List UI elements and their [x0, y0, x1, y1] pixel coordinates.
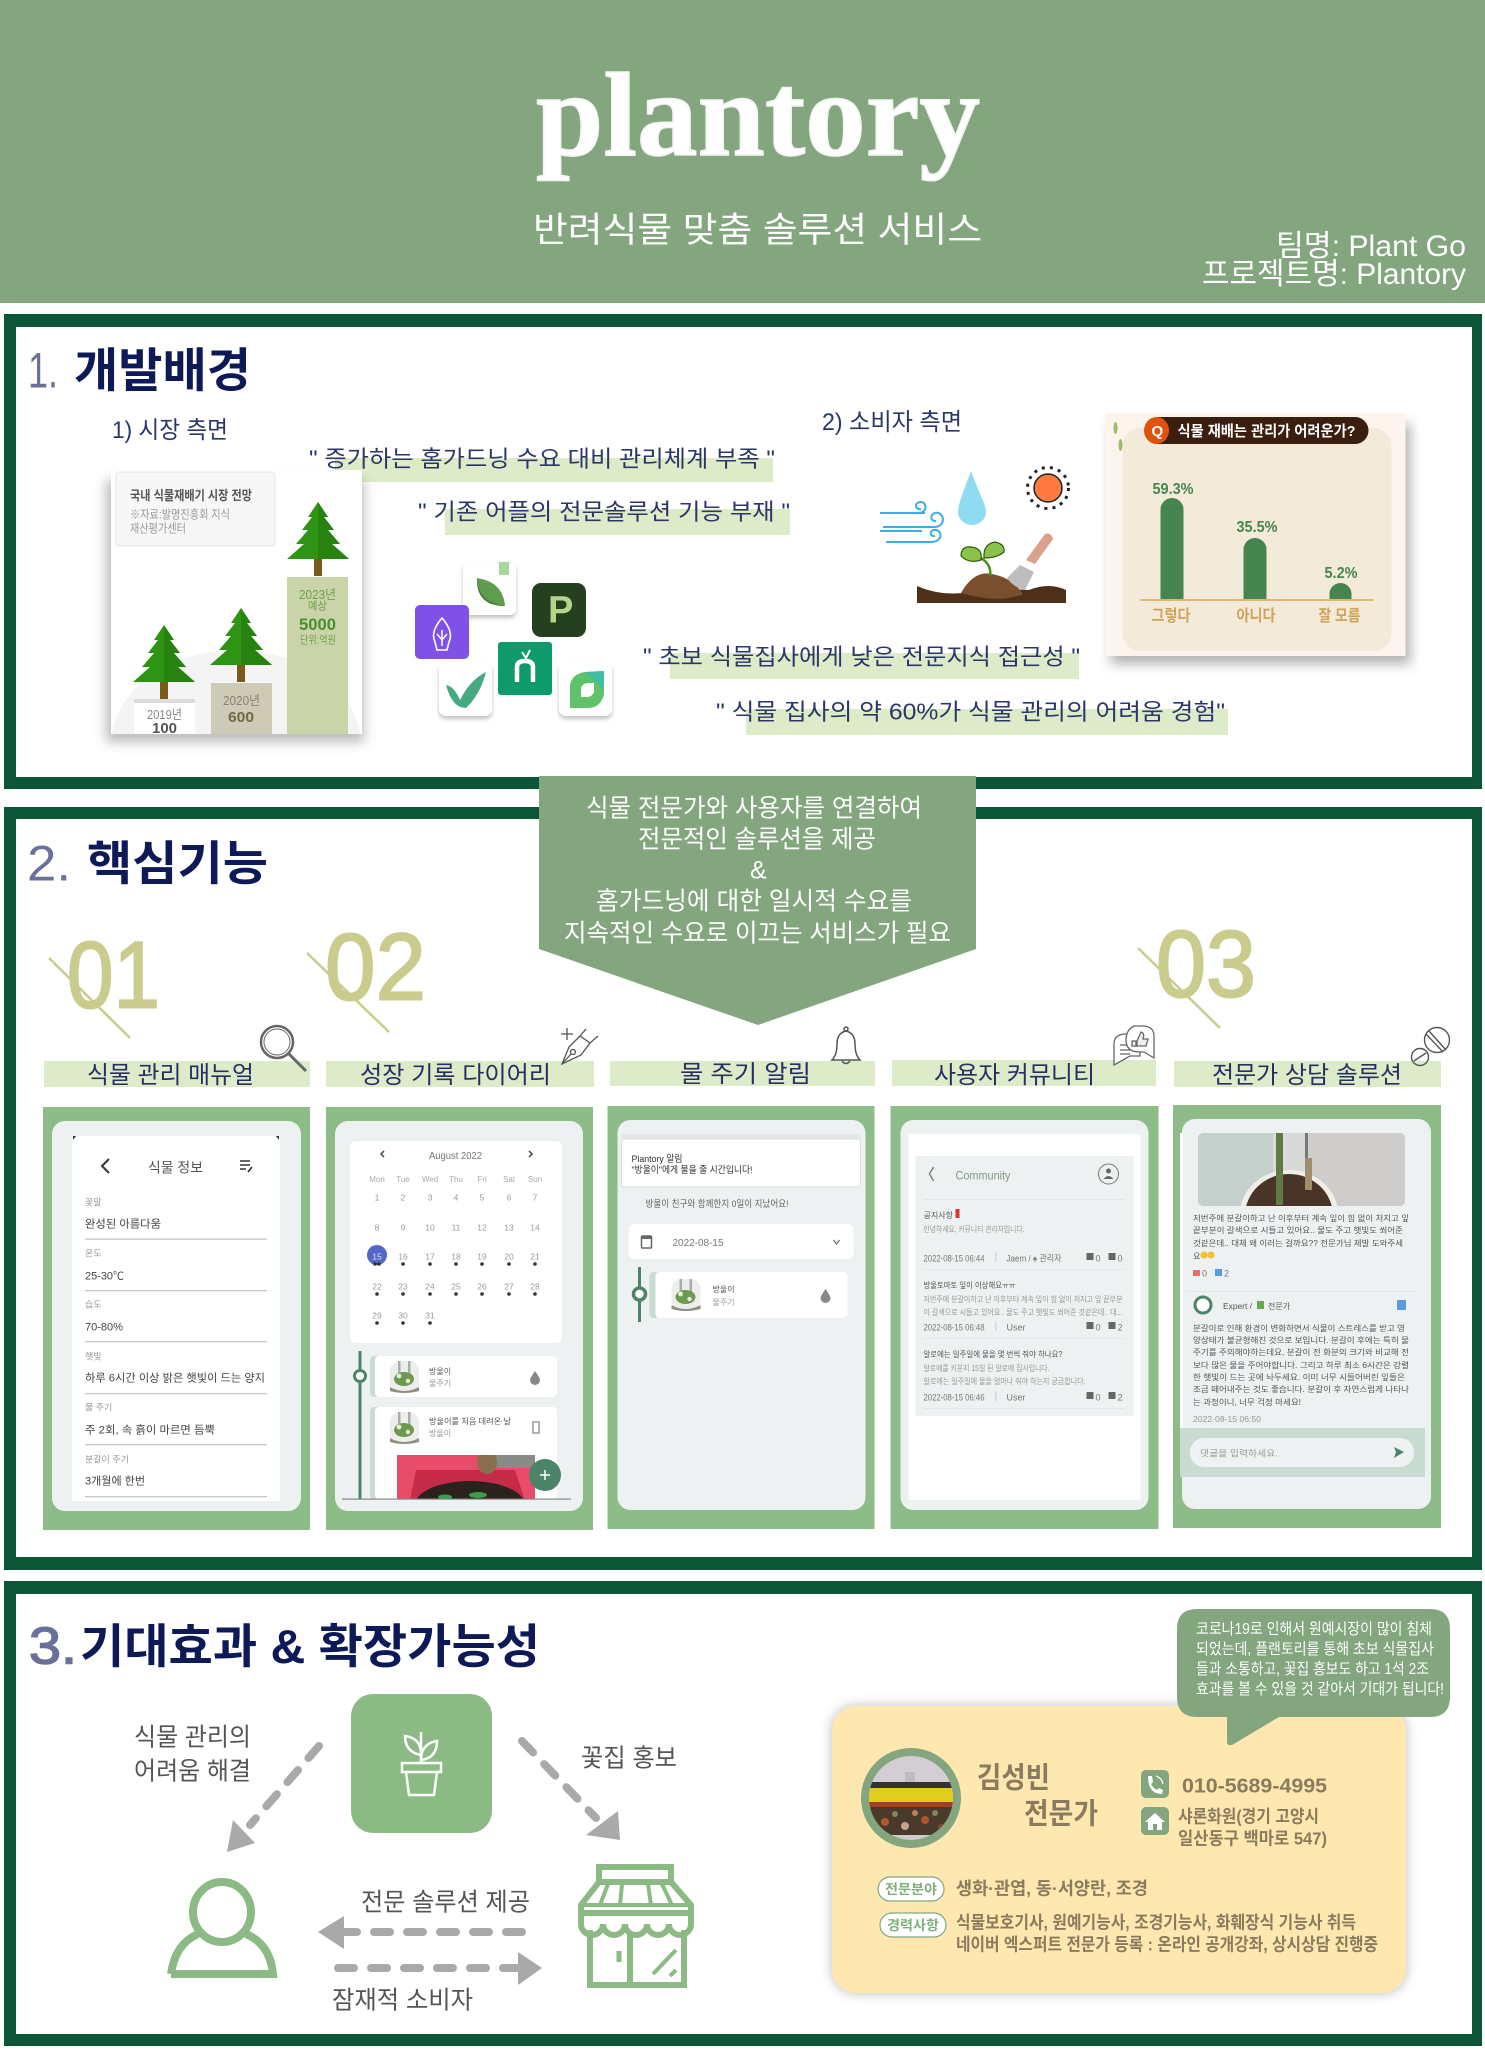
- calendar: Tue: [396, 1175, 410, 1184]
- calendar: 30: [398, 1310, 408, 1320]
- calendar: Wed: [422, 1175, 438, 1184]
- calendar: [350, 1141, 562, 1343]
- subtitle: 반려식물 맞춤 솔루션 서비스: [533, 211, 982, 250]
- market forecast chart: 재산평가센터: [130, 521, 186, 535]
- calendar: 6: [507, 1192, 512, 1202]
- phone card 1: plant info: 하루 6시간 이상 밝은 햇빛이 드는 양지: [85, 1370, 265, 1384]
- market forecast chart: 2019년: [147, 707, 182, 722]
- market forecast chart: 2020년: [223, 693, 260, 708]
- phone card 2: growth diary: [326, 1107, 593, 1530]
- phone card 4: community: Jaem / ♠ 관리자: [1006, 1253, 1062, 1263]
- header banner: [0, 0, 1485, 303]
- calendar: 10: [425, 1222, 435, 1232]
- quote 4: " 식물 집사의 약 60%가 식물 관리의 어려움 경험": [716, 698, 1225, 724]
- heading: 3: 기대효과 & 확장가능성: [80, 1620, 540, 1673]
- phone card 5: expert consultation: 전문가: [1268, 1301, 1291, 1311]
- date select: [628, 1224, 854, 1259]
- feature title 1: 식물 관리 매뉴얼: [87, 1062, 254, 1089]
- diary timeline: 방울이: [429, 1366, 451, 1376]
- number 01: [49, 922, 160, 1038]
- feature title 4: 사용자 커뮤니티: [934, 1062, 1095, 1089]
- icon: phone: [1141, 1770, 1169, 1798]
- calendar: August 2022: [429, 1151, 482, 1162]
- calendar: 19: [477, 1251, 487, 1261]
- watering timeline: 방울이: [712, 1284, 735, 1294]
- survey bar chart: 그렇다: [1152, 606, 1191, 625]
- icons: gardening apps: [415, 562, 612, 719]
- callout: need statement banner: [539, 776, 976, 1025]
- phone card 1: plant info: 25-30℃: [85, 1270, 124, 1282]
- number 01: 01: [67, 922, 160, 1028]
- phone card 5: expert consultation: Expert /: [1223, 1302, 1253, 1311]
- phone card 4: community: 알로에는 일주일에 물을 얼마나 줘야 하는지 궁금합니다.: [924, 1376, 1086, 1386]
- calendar: 21: [530, 1251, 540, 1261]
- watering timeline: [634, 1267, 848, 1322]
- date select: 2022-08-15: [672, 1238, 724, 1249]
- phone card 1: plant info: 분갈이 주기: [85, 1454, 129, 1464]
- phone card 3: watering alert: 방울이 친구와 함께한지 0일이 지났어요!: [646, 1198, 788, 1210]
- feature title 1: [44, 1061, 310, 1089]
- plant photo: [1198, 1133, 1405, 1206]
- career: 네이버 엑스퍼트 전문가 등록 : 온라인 공개강좌, 상시상담 진행중: [956, 1934, 1378, 1954]
- calendar: Sun: [528, 1175, 542, 1184]
- phone card 4: community: 0: [1118, 1253, 1123, 1263]
- calendar: 25: [451, 1281, 461, 1291]
- phone card 4: community: 2022-08-15 06:46: [924, 1392, 984, 1402]
- survey bar chart: 잘 모름: [1318, 607, 1361, 625]
- project name: 프로젝트명: Plantory: [1202, 258, 1466, 291]
- calendar: 20: [504, 1251, 514, 1261]
- heading: 2: [27, 835, 268, 891]
- icon: fountain pen: [561, 1028, 598, 1064]
- callout: expert quote bubble: 코로나19로 인해서 원예시장이 많이 침체: [1196, 1620, 1432, 1638]
- label: solving plant care difficulty: [134, 1723, 251, 1785]
- career: 식물보호기사, 원예기능사, 조경기능사, 화훼장식 기능사 취득: [956, 1912, 1356, 1932]
- diary timeline: 방울이: [429, 1428, 451, 1438]
- phone card 5: expert consultation: 0: [1202, 1268, 1207, 1278]
- diary timeline: 물주기: [429, 1379, 451, 1388]
- calendar: 27: [504, 1281, 514, 1291]
- calendar: 1: [375, 1192, 380, 1202]
- phone card 4: community: 공지사항: [924, 1211, 954, 1220]
- title: plantory: [536, 48, 980, 181]
- phone card 4: community: 알로에를 키운지 15일 된 알로에 집사입니다.: [924, 1363, 1050, 1373]
- calendar: Sat: [503, 1175, 516, 1184]
- phone card 5: expert consultation: 조금 떼어내주는 것도 좋습니다. 분갈이 후 자연스럽게 나타나: [1193, 1384, 1410, 1394]
- phone card 1: plant info: 꽃말: [85, 1196, 102, 1207]
- callout: need statement banner: 전문적인 솔루션을 제공: [638, 825, 876, 853]
- calendar: 17: [425, 1251, 435, 1261]
- career: 경력사항: [887, 1918, 940, 1933]
- phone card 5: expert consultation: 는 과정이니, 너무 걱정 마세요!: [1193, 1397, 1301, 1407]
- market forecast chart: 예상: [308, 599, 327, 612]
- quote 1: [309, 445, 775, 482]
- callout: expert quote bubble: 되었는데, 플랜토리를 통해 초보 식물집사: [1196, 1640, 1434, 1658]
- phone card 4: community: Community: [956, 1168, 1010, 1182]
- arrow: shop to user: [318, 1916, 522, 1949]
- calendar: 5: [480, 1192, 485, 1202]
- calendar: 13: [504, 1222, 514, 1232]
- arrow: plant to user: [227, 1746, 319, 1852]
- calendar: 14: [530, 1222, 540, 1232]
- expert photo: [861, 1748, 961, 1848]
- callout: expert quote bubble: 효과를 볼 수 있을 것 같아서 기대가 됩니다!: [1196, 1680, 1444, 1698]
- calendar: 7: [533, 1192, 538, 1202]
- feature title 3: [610, 1061, 875, 1088]
- market forecast chart: 2023년: [299, 587, 336, 602]
- market forecast chart: 5000: [299, 615, 336, 634]
- panel: development background: [4, 314, 1482, 840]
- phone card 5: expert consultation: 주기를 주의해야하는데요, 분갈이 전 화분의 크기와 비교해 전: [1193, 1347, 1409, 1357]
- market forecast chart: 100: [152, 720, 177, 737]
- phone number: 010-5689-4995: [1182, 1775, 1327, 1797]
- heading: 2: 핵심기능: [87, 837, 268, 890]
- calendar: Fri: [477, 1175, 487, 1184]
- phone card 5: expert consultation: 보다 많은 물을 주어야합니다. 그리고 하루 최소 6시간은 강렬: [1193, 1360, 1409, 1370]
- plant square icon: [351, 1694, 492, 1833]
- icon: magnifier: [261, 1026, 306, 1071]
- heading: 2: 2.: [27, 835, 71, 891]
- heading: 1: 1.: [28, 342, 58, 398]
- number 02: 02: [325, 914, 426, 1020]
- panel: expected effects: [4, 1581, 1482, 2046]
- team name: 팀명: Plant Go: [1276, 230, 1466, 263]
- quote 4: [716, 698, 1228, 735]
- calendar: 28: [530, 1281, 540, 1291]
- feature title 2: 성장 기록 다이어리: [360, 1062, 551, 1089]
- sub heading: market: 1) 시장 측면: [112, 417, 228, 444]
- arrow: user to shop: [338, 1952, 542, 1985]
- callout: expert quote bubble: 들과 소통하고, 꽃집 홍보도 하고 1석 2조: [1196, 1660, 1429, 1678]
- phone card 4: community: 0: [1096, 1322, 1101, 1332]
- calendar: 31: [425, 1310, 435, 1320]
- heading: 1: 개발배경: [74, 344, 251, 397]
- career: [880, 1912, 1378, 1954]
- comment input: 댓글을 입력하세요.: [1200, 1447, 1278, 1458]
- feature title 4: [892, 1060, 1156, 1089]
- phone card 4: community: 안녕하세요, 커뮤니티 관리자입니다.: [924, 1224, 1024, 1234]
- calendar: 18: [451, 1251, 461, 1261]
- panel: core features: [4, 807, 1482, 1570]
- arrow: plant to shop: [522, 1741, 620, 1840]
- notification: [622, 1139, 860, 1187]
- illustration: plant with wind, water and sun: [880, 468, 1068, 603]
- phone card 1: plant info: 식물 정보: [148, 1159, 203, 1175]
- address: 샤론화원(경기 고양시: [1178, 1806, 1319, 1826]
- market forecast chart: ※자료:발명진흥회 지식: [130, 507, 230, 521]
- survey bar chart: 35.5%: [1236, 519, 1278, 536]
- phone card 4: community: 저번주에 분갈이하고 난 이후부터 계속 잎이 힘 없이 처지고 잎 끝부분: [924, 1294, 1122, 1304]
- phone card 1: plant info: 70-80%: [85, 1321, 123, 1333]
- market forecast chart: [100, 470, 370, 748]
- phone card 1: plant info: 햇빛: [85, 1350, 102, 1361]
- feature title 2: [326, 1061, 594, 1089]
- callout: need statement banner: &: [750, 856, 767, 884]
- phone card 4: community: 0: [1096, 1253, 1101, 1263]
- callout: expert quote bubble: [1177, 1609, 1450, 1745]
- expert name: 김성빈: [977, 1761, 1050, 1794]
- phone card 4: community: 2: [1118, 1392, 1123, 1402]
- icon: flower shop: [581, 1867, 691, 1985]
- label: solving plant care difficulty: 어려움 해결: [134, 1757, 251, 1785]
- specialty: 전문분야: [885, 1882, 938, 1897]
- calendar: 23: [398, 1281, 408, 1291]
- comment input: [1180, 1428, 1425, 1477]
- phone card 5: expert consultation: 요: [1193, 1252, 1200, 1261]
- survey question: 식물 재배는 관리가 어려운가?: [1178, 423, 1356, 440]
- calendar: 24: [425, 1281, 435, 1291]
- phone card 4: community: 2: [1118, 1322, 1123, 1332]
- callout: need statement banner: 지속적인 수요로 이끄는 서비스가 필요: [564, 919, 951, 947]
- icon: home: [1141, 1807, 1169, 1835]
- calendar: 16: [398, 1251, 408, 1261]
- survey bar chart: 아니다: [1236, 607, 1276, 625]
- calendar: 29: [372, 1310, 382, 1320]
- calendar: 15: [372, 1251, 382, 1261]
- quote 2: [418, 498, 790, 535]
- phone card 1: plant info: 온도: [85, 1248, 102, 1258]
- phone card 4: community: 0: [1096, 1392, 1101, 1402]
- label: expert solution: 전문 솔루션 제공: [361, 1888, 530, 1916]
- quote 3: " 초보 식물집사에게 낮은 전문지식 접근성 ": [643, 643, 1080, 669]
- calendar: 2: [401, 1192, 406, 1202]
- expert title: 전문가: [1024, 1797, 1098, 1830]
- diary timeline: 방울이를 처음 데려온 날: [429, 1416, 512, 1426]
- phone card 5: expert consultation: 한 햇빛이 드는 곳에 놔두세요. 이미 너무 시들어버린 잎들은: [1193, 1372, 1405, 1382]
- expert card: [832, 1706, 1406, 1993]
- heading: 3: 3.: [29, 1617, 77, 1675]
- calendar: 26: [477, 1281, 487, 1291]
- label: potential consumer: 잠재적 소비자: [332, 1986, 473, 2014]
- calendar: 22: [372, 1281, 382, 1291]
- label: flower shop promotion: 꽃집 홍보: [581, 1744, 677, 1772]
- survey bar chart: 59.3%: [1152, 481, 1194, 498]
- phone card 4: community: [890, 1106, 1158, 1529]
- calendar: 12: [477, 1222, 487, 1232]
- phone card 4: community: 2022-08-15 06:44: [924, 1253, 984, 1263]
- phone card 1: plant info: 주 2회, 속 흙이 마르면 듬뿍: [85, 1423, 215, 1436]
- phone card 1: plant info: 완성된 아름다움: [85, 1217, 161, 1230]
- quote 3: [643, 643, 1080, 679]
- callout: need statement banner: 식물 전문가와 사용자를 연결하여: [586, 794, 922, 822]
- icon: bell: [832, 1027, 860, 1064]
- icon: chat thumbs up: [1114, 1026, 1154, 1065]
- phone card 5: expert consultation: 2022-08-15 06:50: [1193, 1415, 1262, 1424]
- calendar: 11: [452, 1222, 461, 1232]
- phone card 4: community: User: [1006, 1322, 1026, 1332]
- phone card 5: expert consultation: 분갈이로 인해 환경이 변화하면서 식물이 스트레스를 받고 영: [1193, 1323, 1405, 1333]
- calendar: Thu: [449, 1175, 463, 1184]
- phone card 5: expert consultation: 끝부분이 갈색으로 시들고 있어요.. 물도 주고 햇빛도 쐬어준: [1193, 1225, 1403, 1235]
- phone card 3: watering alert: [608, 1106, 874, 1529]
- phone card 1: plant info: [43, 1107, 310, 1530]
- calendar: 8: [375, 1222, 380, 1232]
- specialty: 생화·관엽, 동·서양란, 조경: [956, 1878, 1148, 1898]
- phone card 4: community: 방울토마토 잎이 이상해요ㅠㅠ: [924, 1280, 1016, 1290]
- phone card 1: plant info: 습도: [85, 1299, 102, 1309]
- survey question: [1144, 417, 1368, 444]
- phone card 1: plant info: 물 주기: [85, 1402, 112, 1412]
- address: 일산동구 백마로 547): [1178, 1828, 1327, 1848]
- calendar: Mon: [369, 1175, 385, 1184]
- calendar: 9: [401, 1222, 406, 1232]
- phone card 4: community: User: [1006, 1392, 1026, 1402]
- phone card 5: expert consultation: 2: [1224, 1268, 1229, 1278]
- phone card 5: expert consultation: 것같은데.. 대체 왜 이러는 걸까요?? 전문가님 제발 도와주세: [1193, 1238, 1403, 1248]
- survey bar chart: 5.2%: [1324, 565, 1358, 582]
- number 03: 03: [1156, 911, 1256, 1017]
- survey question: Q: [1152, 423, 1164, 440]
- callout: need statement banner: 홈가드닝에 대한 일시적 수요를: [596, 887, 912, 915]
- icon: pills: [1412, 1028, 1450, 1066]
- market forecast chart: 600: [228, 709, 254, 726]
- survey bar chart: [1106, 413, 1410, 664]
- quote 2: " 기존 어플의 전문솔루션 기능 부재 ": [418, 498, 790, 524]
- icon: user: [171, 1882, 273, 1974]
- specialty: [878, 1877, 1148, 1901]
- phone card 1: plant info: 3개월에 한번: [85, 1474, 145, 1487]
- phone card 4: community: 2022-08-15 06:48: [924, 1322, 984, 1332]
- sub heading: consumer: 2) 소비자 측면: [822, 409, 962, 436]
- watering timeline: 물주기: [712, 1298, 735, 1307]
- calendar: 4: [454, 1192, 459, 1202]
- market forecast chart: 단위:억원: [300, 633, 336, 646]
- feature title 5: [1174, 1061, 1441, 1089]
- phone card 5: expert consultation: 양상태가 불균형해진 것으로 보입니다. 분갈이 후에는 특히 물: [1193, 1335, 1409, 1345]
- label: solving plant care difficulty: 식물 관리의: [134, 1723, 251, 1751]
- feature title 3: 물 주기 알림: [680, 1061, 811, 1088]
- phone card 4: community: 알로에는 일주일에 물을 몇 번씩 줘야 하나요?: [924, 1349, 1063, 1359]
- calendar: 3: [428, 1192, 433, 1202]
- quote 1: " 증가하는 홈가드닝 수요 대비 관리체계 부족 ": [309, 445, 775, 471]
- feature title 5: 전문가 상담 솔루션: [1212, 1062, 1402, 1089]
- icons: gardening apps: P: [548, 589, 573, 631]
- notification: Plantory 알림: [632, 1153, 682, 1165]
- market forecast chart: 국내 식물재배기 시장 전망: [130, 488, 252, 503]
- phone card 4: community: 이 갈색으로 시들고 있어요.. 물도 주고 햇빛도 쐬어준 것같은데.. 대...: [924, 1307, 1122, 1317]
- phone card 5: expert consultation: 저번주에 분갈이하고 난 이후부터 계속 잎이 힘 없이 처지고 잎: [1193, 1213, 1409, 1223]
- diary timeline: [342, 1351, 571, 1500]
- address: [1178, 1806, 1327, 1848]
- notification: "방울이"에게 물을 줄 시간입니다!: [632, 1164, 752, 1176]
- phone card 5: expert consultation: [1173, 1105, 1441, 1528]
